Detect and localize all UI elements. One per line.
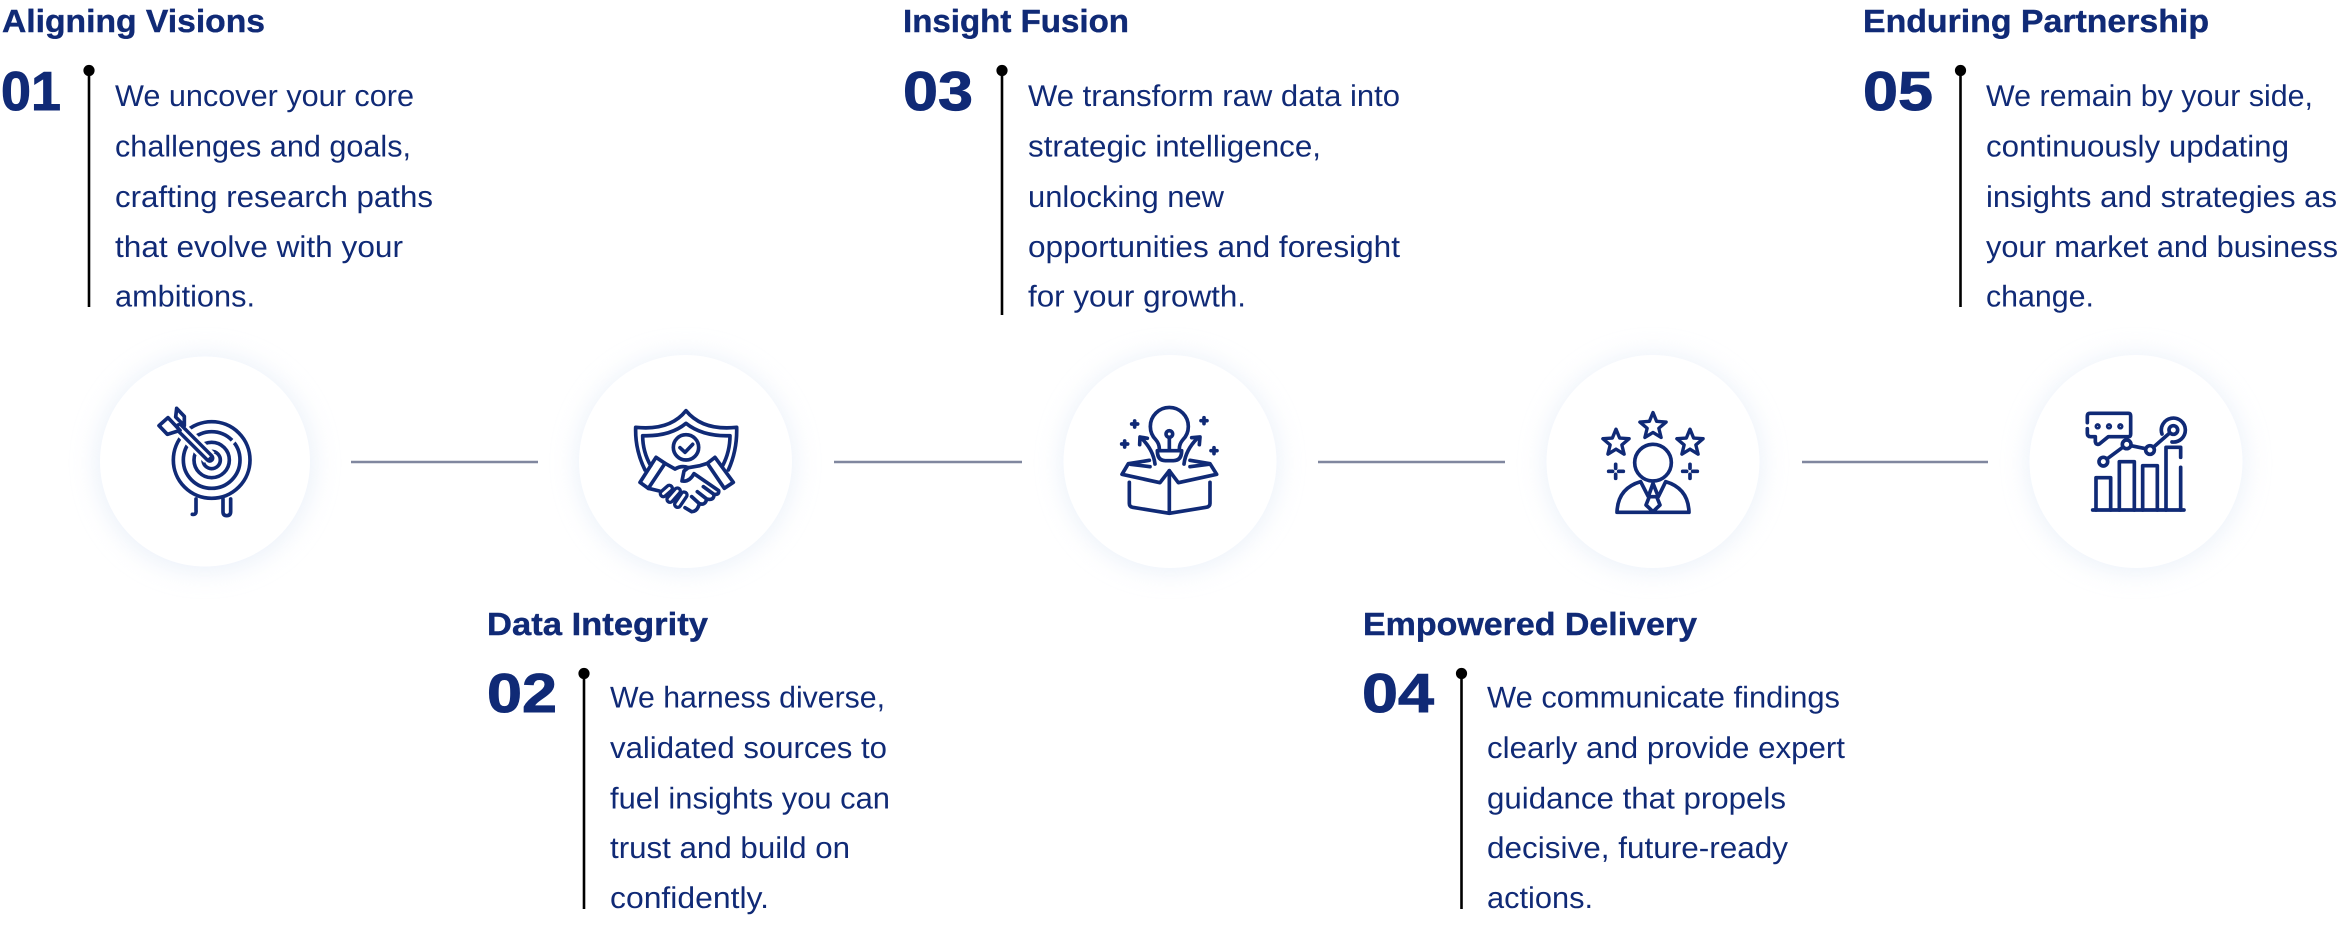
icon circle 1: target [97,355,313,571]
icon: person with three stars [1603,413,1703,512]
description: opportunities and foresight [1028,231,1401,264]
number 04: 04 [1362,662,1434,724]
panel: step 04 Empowered Delivery [1362,606,1846,915]
heading: Insight Fusion: Insight Fusion [903,3,1129,39]
description: your market and business [1986,231,2338,264]
description: that evolve with your [115,231,403,264]
description: trust and build on [610,832,850,865]
number 05: 05 [1863,60,1933,122]
description [610,682,890,915]
number 01: 01 [1,60,61,122]
icon: target with arrow [159,408,250,516]
description: clearly and provide expert [1487,732,1846,765]
icon: bar chart with speech bubble [2087,413,2185,510]
description: fuel insights you can [610,782,890,816]
timeline marker [1456,668,1467,909]
panel: step 05 Enduring Partnership [1863,3,2338,314]
description: unlocking new [1028,181,1224,214]
icon circle 5: growth chart [2028,355,2244,571]
icon: light bulb rising from box [1122,407,1217,513]
heading: Empowered Delivery: Empowered Delivery [1363,606,1697,642]
description [1986,80,2338,314]
description: strategic intelligence, [1028,130,1321,164]
description: guidance that propels [1487,782,1786,816]
description [115,80,433,314]
description: continuously updating [1986,130,2289,164]
description: confidently. [610,882,769,915]
description [1028,80,1401,314]
description: decisive, future-ready [1487,832,1788,865]
connector 2-3 [834,461,1022,463]
description [1487,682,1846,915]
connector 4-5 [1802,461,1988,463]
connector 1-2 [351,461,538,463]
icon: handshake and shield [636,411,737,512]
description: ambitions. [115,280,255,314]
description: validated sources to [610,732,887,765]
description: actions. [1487,882,1593,915]
timeline marker [1955,65,1966,307]
icon circle 3: idea box [1062,355,1278,571]
panel: step 03 Insight Fusion [903,3,1401,315]
description: challenges and goals, [115,130,411,164]
description: We communicate findings [1487,682,1840,714]
description: for your growth. [1028,280,1246,314]
panel: step 01 Aligning Visions [1,3,433,314]
description: We remain by your side, [1986,80,2313,113]
number 02: 02 [487,662,557,724]
icon circle 2: handshake shield [578,355,794,571]
description: We transform raw data into [1028,80,1400,113]
description: We harness diverse, [610,682,885,714]
timeline marker [996,65,1008,315]
description: change. [1986,280,2094,314]
description: We uncover your core [115,80,414,113]
timeline marker [83,65,95,307]
timeline marker [578,668,590,909]
description: insights and strategies as [1986,181,2337,214]
panel: step 02 Data Integrity [487,606,890,915]
heading: Aligning Visions: Aligning Visions [2,3,265,39]
connector 3-4 [1318,461,1505,463]
icon circle 4: rated expert [1545,355,1761,571]
heading: Data Integrity: Data Integrity [487,606,708,642]
heading: Enduring Partnership: Enduring Partnership [1863,3,2209,39]
number 03: 03 [903,60,973,122]
description: crafting research paths [115,181,433,214]
